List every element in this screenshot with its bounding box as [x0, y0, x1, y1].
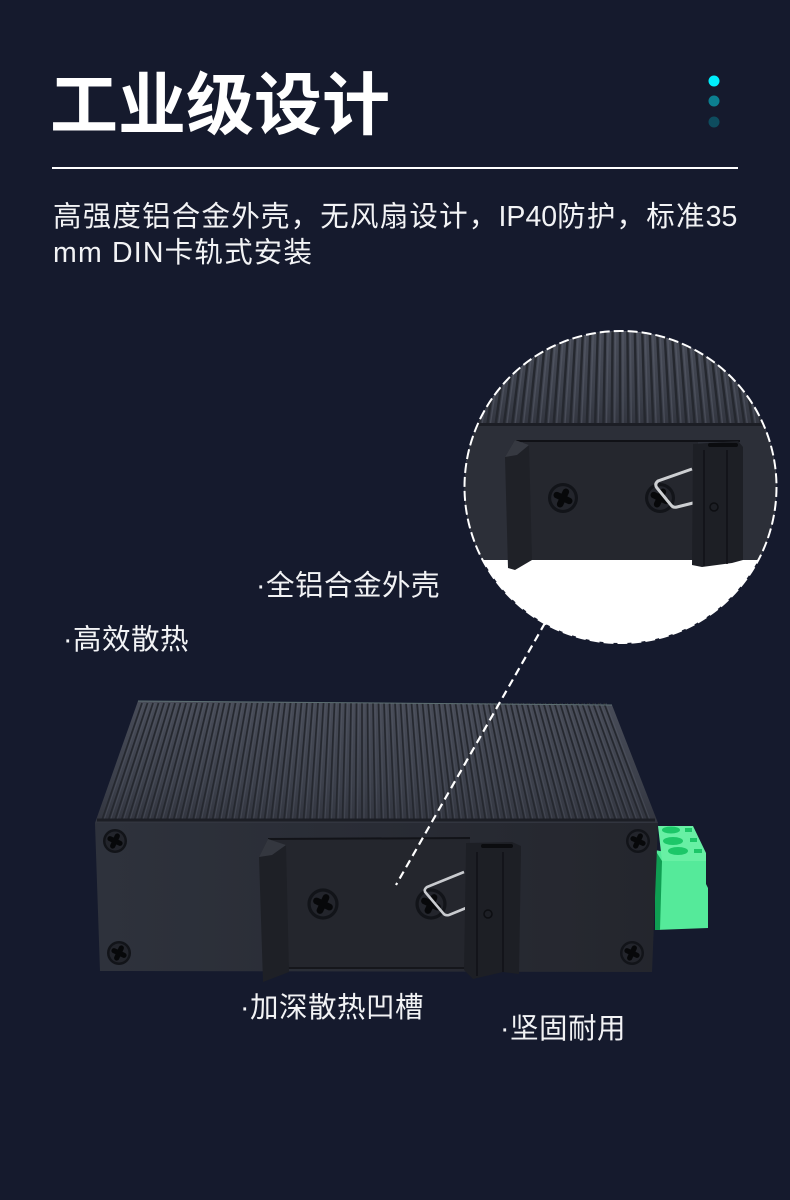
- left rail clip: [259, 839, 289, 982]
- label: sturdy and durable: ·坚固耐用: [500, 1013, 626, 1045]
- device: [95, 701, 708, 982]
- magnified detail circle: [460, 326, 781, 648]
- description text: mm DIN卡轨式安装: [53, 237, 313, 269]
- case corner screws: [103, 829, 650, 965]
- dashed leader line: [396, 623, 545, 885]
- ribbed top of aluminium case: [95, 701, 658, 823]
- label: full aluminium shell: ·全铝合金外壳: [256, 570, 440, 602]
- decorative dots icon: [708, 76, 720, 128]
- front face of case: [95, 823, 658, 972]
- right rail clip: [464, 842, 521, 979]
- label: efficient heat dissipation: ·高效散热: [63, 624, 189, 656]
- header divider: [52, 167, 738, 169]
- spring wire: [425, 872, 466, 915]
- title: 工业级设计: [50, 68, 390, 144]
- green terminal connector: [655, 826, 708, 930]
- product illustration layer: [52, 76, 778, 982]
- label: deep cooling grooves: ·加深散热凹槽: [240, 992, 424, 1024]
- description text: [53, 201, 737, 269]
- plate screws: [307, 888, 447, 920]
- DIN rail plate: [268, 838, 470, 968]
- description text: 高强度铝合金外壳，无风扇设计，IP40防护，标准35: [53, 201, 737, 233]
